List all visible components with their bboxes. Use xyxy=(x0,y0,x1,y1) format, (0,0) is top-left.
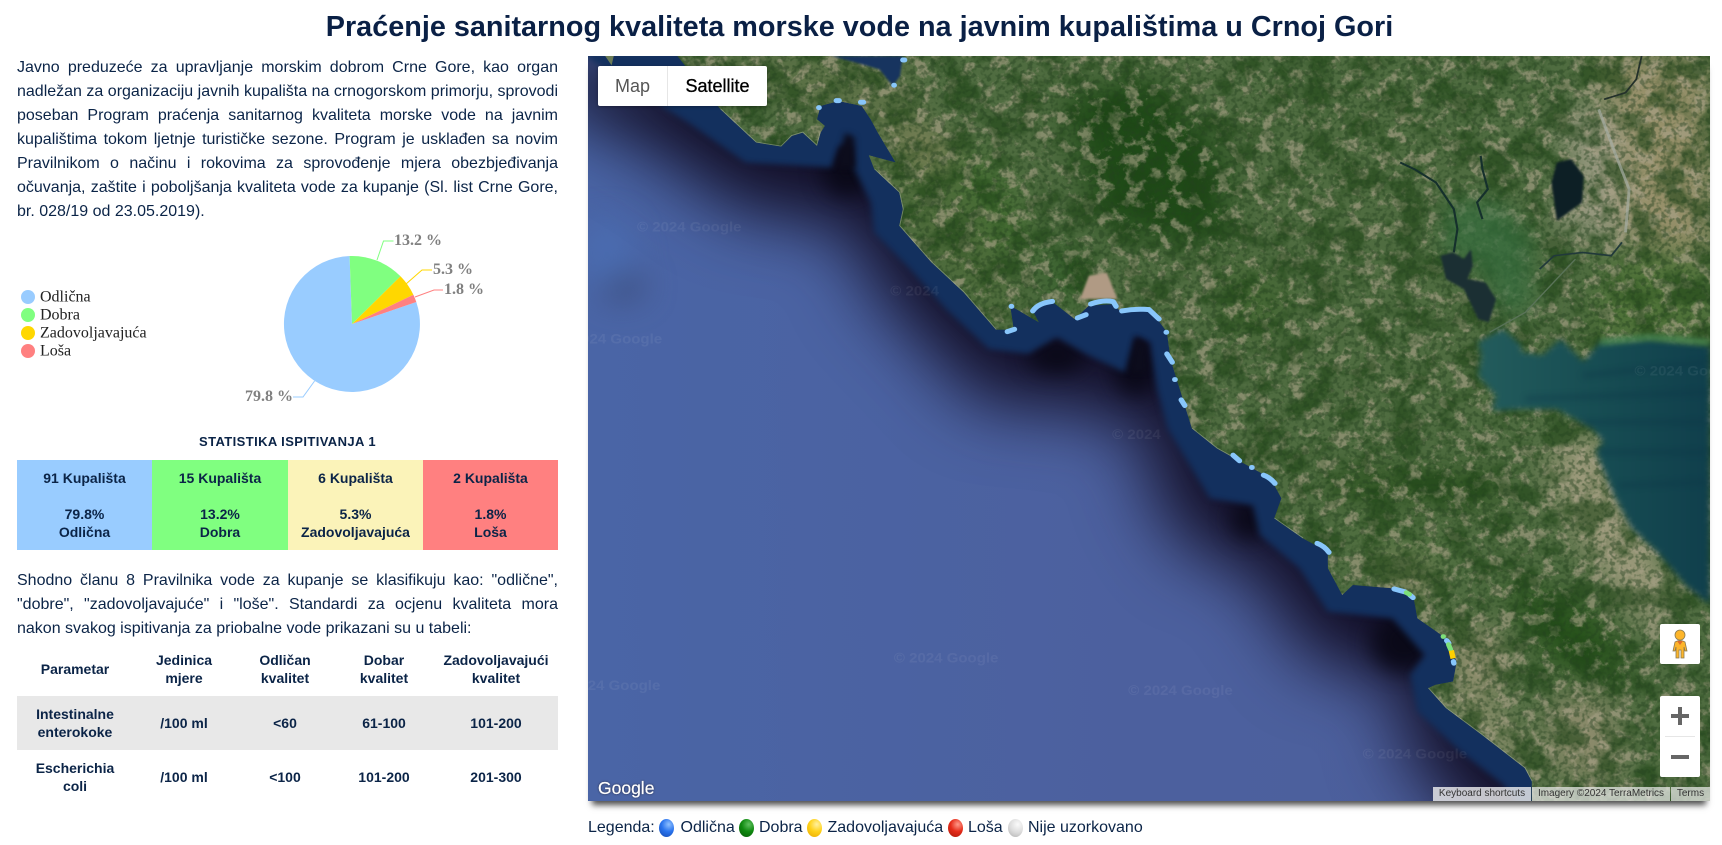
legend: Zadovoljavajuća: Zadovoljavajuća xyxy=(40,324,147,342)
Skadar lake xyxy=(1478,329,1710,605)
row: Escherichia coli: coli xyxy=(63,778,87,794)
attribution: keyboard shortcuts xyxy=(1433,787,1531,801)
icon: minus xyxy=(1671,755,1689,759)
attribution: terms xyxy=(1671,787,1710,801)
value: 101-200 xyxy=(358,769,410,785)
coastal notch shadows xyxy=(822,143,1436,672)
intro paragraph: br. 028/19 od 23.05.2019). xyxy=(17,203,205,220)
lake stripes xyxy=(1525,362,1710,485)
header: Jedinica mjere: mjere xyxy=(165,670,203,686)
statistics heading: STATISTIKA ISPITIVANJA 1 xyxy=(199,434,376,449)
regional colour patches xyxy=(677,56,1710,782)
header: Odličan kvalitet: kvalitet xyxy=(261,670,309,686)
value: 61-100 xyxy=(362,715,406,731)
text: Dobra: Dobra xyxy=(759,819,803,836)
watermarks: © 2024 Google xyxy=(894,651,998,666)
map legend xyxy=(588,819,1143,837)
tab: Map: Map xyxy=(615,76,650,96)
stat: Zadovoljavajuća xyxy=(288,460,423,550)
wetland xyxy=(1443,199,1533,316)
pin: Odlična xyxy=(659,819,674,837)
Google logo: Google xyxy=(598,778,654,798)
header: Dobar kvalitet: Dobar xyxy=(364,652,404,668)
north plain river xyxy=(1540,56,1642,269)
header: Odličan kvalitet xyxy=(259,652,311,686)
header: Parametar: Parametar xyxy=(41,661,109,677)
legend: Odlična: Odlična xyxy=(40,288,91,306)
label: 13.2 %: 13.2 % xyxy=(394,232,442,249)
stat: Dobra: 13.2% xyxy=(200,506,240,522)
beach markers: good xyxy=(1406,593,1451,650)
label: 1.8 % xyxy=(415,281,484,298)
value: 201-300 xyxy=(470,769,522,785)
header: Zadovoljavajući kvalitet: kvalitet xyxy=(472,670,520,686)
value: /100 ml xyxy=(160,715,208,731)
legend: Loša: Loša xyxy=(40,342,71,360)
watermarks: © 2024 xyxy=(1112,427,1161,443)
sea shading blotches xyxy=(581,219,643,302)
row: Intestinalne enterokoke xyxy=(36,706,114,740)
coastal dark halo xyxy=(516,23,1722,845)
header: Dobar kvalitet xyxy=(360,652,408,686)
stat: Odlična xyxy=(17,460,152,550)
upper lagoon xyxy=(1441,249,1496,322)
intro paragraph: kupalištima tokom ljetnje turističke sezone. Program je usklađen sa novim xyxy=(17,131,558,148)
title: Praćenje sanitarnog kvaliteta morske vode na javnim kupalištima u Crnoj Gori xyxy=(326,11,1393,43)
value: <60 xyxy=(273,715,297,731)
slice: Dobra 13.2% xyxy=(350,256,400,324)
slice: Odlična 79.8% xyxy=(284,256,420,392)
town xyxy=(1080,272,1118,299)
intro paragraph xyxy=(17,59,558,220)
header: Jedinica mjere xyxy=(156,652,212,686)
label: 5.3 %: 5.3 % xyxy=(433,261,473,278)
land xyxy=(588,56,1710,801)
watermarks: © 2024 Google xyxy=(637,220,742,235)
legend: Dobra: Dobra xyxy=(40,306,80,324)
top-left islet xyxy=(605,56,614,65)
zoom control xyxy=(1660,696,1700,777)
map type control xyxy=(598,66,767,106)
standards table xyxy=(17,652,558,794)
pin: Nije uzorkovano xyxy=(1008,819,1022,837)
causeway xyxy=(1490,259,1575,332)
slice: Loša 1.8% xyxy=(352,295,416,324)
label: 79.8 % xyxy=(245,381,315,405)
terrain noise: tan patches xyxy=(588,56,1710,801)
top bay xyxy=(831,56,903,86)
value: /100 ml xyxy=(160,769,208,785)
river and wetland lines xyxy=(1400,156,1488,252)
stat: Dobra: Dobra xyxy=(200,524,240,540)
watermarks: © 2024 Google xyxy=(1363,747,1467,762)
shallow navy coastal band xyxy=(581,53,1590,805)
pin: Zadovoljavajuća xyxy=(807,819,822,837)
intro paragraph: Javno preduzeće za upravljanje morskim dobrom Crne Gore, kao organ xyxy=(17,59,558,76)
pin: Loša xyxy=(948,819,962,837)
stat: Odlična: 91 Kupališta xyxy=(43,470,126,486)
legend: Loša xyxy=(21,342,71,360)
label: 1.8 %: 1.8 % xyxy=(444,281,484,298)
stat: Zadovoljavajuća: Zadovoljavajuća xyxy=(301,524,410,540)
classification paragraph: Shodno članu 8 Pravilnika vode za kupanje se klasifikuju kao: "odlične", xyxy=(17,572,558,589)
header: Jedinica mjere: Jedinica xyxy=(156,652,212,668)
pie chart xyxy=(21,232,484,405)
row: Intestinalne enterokoke: enterokoke xyxy=(38,724,112,740)
classification paragraph: "dobre", "zadovoljavajuće" i "loše". Standardi za ocjenu kvaliteta mora xyxy=(17,596,558,613)
stat: Dobra xyxy=(152,460,288,550)
value: 101-200 xyxy=(470,715,522,731)
classification paragraph xyxy=(17,572,558,637)
text: Loša: Loša xyxy=(968,819,1003,836)
lake shore wetland xyxy=(1601,337,1710,342)
stat: Loša: 2 Kupališta xyxy=(453,470,528,486)
header: Zadovoljavajući kvalitet: Zadovoljavajući xyxy=(443,652,549,668)
slice: Zadovoljavajuća 5.3% xyxy=(352,276,413,324)
stat: Odlična: Odlična xyxy=(59,524,110,540)
tab: Satellite: Satellite xyxy=(685,76,750,96)
pin: Dobra xyxy=(738,819,754,837)
attribution: imagery: Imagery ©2024 TerraMetrics xyxy=(1538,788,1664,799)
label: 13.2 % xyxy=(377,232,442,260)
text: Nije uzorkovano: Nije uzorkovano xyxy=(1028,819,1143,836)
land base xyxy=(588,56,1710,801)
value: <100 xyxy=(269,769,301,785)
icon: plus xyxy=(1671,707,1689,725)
header: Zadovoljavajući kvalitet xyxy=(443,652,549,686)
label: 5.3 % xyxy=(406,261,473,284)
stat: Loša: Loša xyxy=(474,524,507,540)
stat: Odlična: 79.8% xyxy=(65,506,104,522)
classification paragraph: nakon svakog ispitivanja za priobalne vode prikazani su u tabeli: xyxy=(17,620,472,637)
watermarks: © 2024 Google xyxy=(1128,683,1233,699)
row background xyxy=(17,696,558,750)
beach markers: excellent xyxy=(819,60,1454,663)
terrain noise: dark forest xyxy=(588,56,1710,801)
intro paragraph: nadležan za organizaciju javnih kupališta na crnogorskom primorju, sprovodi xyxy=(17,83,558,100)
header: Odličan kvalitet: Odličan xyxy=(259,652,311,668)
stat: Zadovoljavajuća: 6 Kupališta xyxy=(318,470,393,486)
row: Escherichia coli xyxy=(36,760,114,794)
dark lake xyxy=(1552,159,1584,221)
legend heading: Legenda: xyxy=(588,819,655,836)
attribution: keyboard shortcuts: Keyboard shortcuts xyxy=(1439,788,1525,799)
terrain noise: fine speckle xyxy=(588,56,1710,801)
intro paragraph: poseban Program praćenja sanitarnog kvaliteta morske vode na javnim xyxy=(17,107,558,124)
icon: pegman xyxy=(1660,624,1700,664)
sea xyxy=(588,56,1710,801)
legend: Dobra xyxy=(21,306,80,324)
notch darks xyxy=(837,133,1148,372)
label: 79.8 %: 79.8 % xyxy=(245,388,293,405)
stat: Loša xyxy=(423,460,558,550)
text: Zadovoljavajuća: Zadovoljavajuća xyxy=(828,819,943,836)
stat: Zadovoljavajuća: 5.3% xyxy=(340,506,371,522)
beach marker: satisfactory xyxy=(1451,651,1453,659)
text: Odlična: Odlična xyxy=(680,819,735,836)
watermarks: © 2024 xyxy=(890,284,939,300)
attribution: terms: Terms xyxy=(1677,788,1704,799)
divider xyxy=(1665,736,1695,737)
satellite map xyxy=(588,56,1710,801)
row: Escherichia coli: Escherichia xyxy=(36,760,114,776)
coast line highlight xyxy=(720,109,1532,781)
stat: Dobra: 15 Kupališta xyxy=(179,470,261,486)
intro paragraph: očuvanja, zaštite i poboljšanja kvaliteta vode za kupanje (Sl. list Crne Gore, xyxy=(17,179,558,196)
watermarks xyxy=(556,220,1722,762)
statistics table xyxy=(17,460,558,550)
tab: Map xyxy=(598,66,668,106)
header: Dobar kvalitet: kvalitet xyxy=(360,670,408,686)
stat: Loša: 1.8% xyxy=(475,506,506,522)
row: Intestinalne enterokoke: Intestinalne xyxy=(36,706,114,722)
intro paragraph: Pravilnikom o načinu i rokovima za sprovođenje mjera obezbjeđivanja xyxy=(17,155,558,172)
